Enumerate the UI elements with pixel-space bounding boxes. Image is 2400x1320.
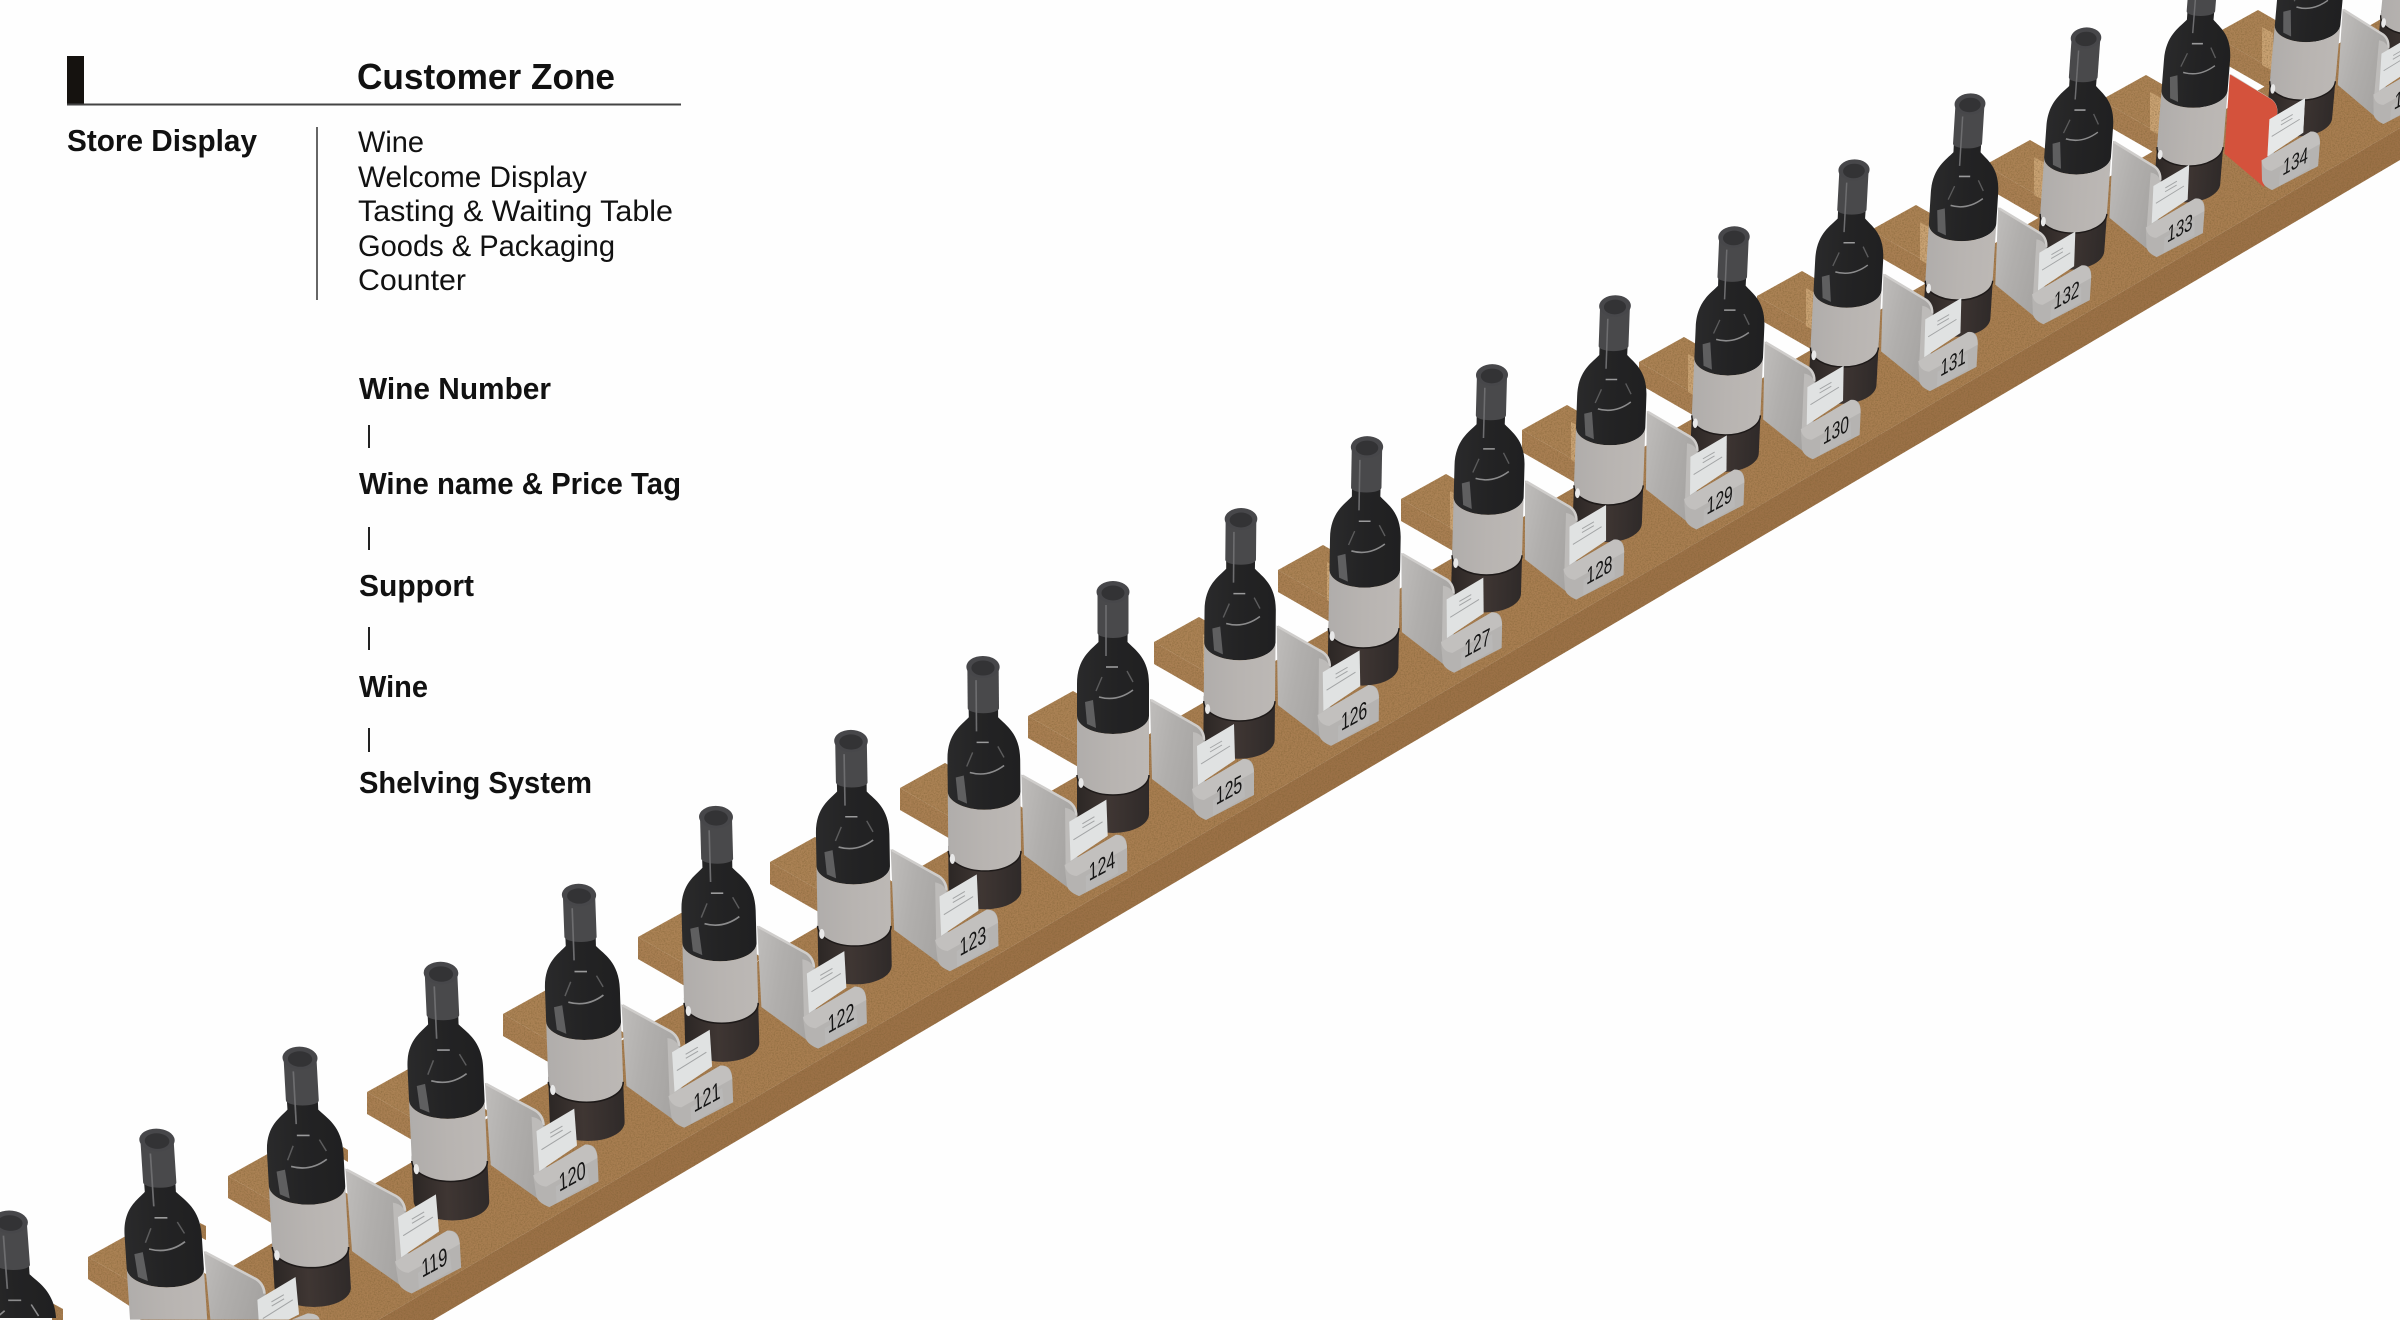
wine number: 129 (1706, 480, 1733, 521)
support, tag and number holder (485, 1083, 600, 1207)
wine unit 129 (1572, 295, 1751, 542)
support, tag and number holder (2221, 74, 2325, 190)
wine unit 118, cropped by the frame (118, 1129, 320, 1320)
support, tag and number holder (2333, 9, 2400, 124)
wine unit 136 (2375, 0, 2400, 70)
wine number: 125 (1216, 770, 1242, 811)
red support panel (2221, 74, 2280, 187)
wine number: 123 (959, 920, 986, 962)
heading: store display: Store Display (67, 123, 258, 158)
wine number: 127 (1464, 623, 1491, 664)
wine bottle (2265, 0, 2352, 136)
wine bottle (2153, 0, 2238, 202)
support, tag and number holder (2105, 141, 2209, 257)
wine bottle (403, 962, 490, 1221)
wine number: 126 (1341, 696, 1367, 737)
wine unit 123 (814, 730, 999, 984)
wine unit 124 (947, 656, 1128, 909)
wine number: 121 (693, 1075, 721, 1118)
red panel tag and holder (2259, 98, 2323, 190)
wine unit 125 (1077, 581, 1254, 833)
wine unit 120 (403, 962, 600, 1221)
wine number: 130 (1823, 410, 1849, 451)
wine number: 124 (1089, 845, 1115, 887)
support, tag and number holder (757, 926, 868, 1049)
wine bottle (1922, 93, 2004, 337)
wine bottle (947, 656, 1022, 909)
wine unit 132 (1922, 93, 2103, 337)
support, tag and number holder (1759, 341, 1864, 459)
wine number: 133 (2166, 209, 2194, 249)
wine bottle (261, 1047, 352, 1307)
wine unit 130 (1689, 226, 1869, 472)
wine number: 131 (1940, 343, 1967, 382)
wine unit 117, cropped by the frame (0, 1211, 56, 1318)
component hierarchy list (359, 371, 681, 800)
component hierarchy list: Wine Number (359, 371, 551, 406)
wine number: 128 (1586, 550, 1613, 591)
wine unit 122 (679, 806, 868, 1062)
component hierarchy list: Wine (359, 669, 428, 704)
component hierarchy list: Wine name & Price Tag (359, 466, 681, 501)
store display list: Wine (358, 126, 424, 159)
wine unit 133 (2036, 27, 2217, 270)
wine bottle (814, 730, 892, 984)
wine bottle (1203, 508, 1277, 759)
support, tag and number holder (1877, 274, 1982, 391)
wine bottle (1689, 226, 1769, 472)
wine bottle (541, 884, 625, 1141)
wine unit 121 (541, 884, 735, 1141)
store display list: Welcome Display (358, 161, 587, 194)
main shelf board front face (378, 128, 2400, 1320)
wine number: 132 (2053, 276, 2080, 316)
support, tag and number holder (621, 1004, 734, 1128)
wine bottle (1807, 159, 1889, 404)
store display list: Counter (358, 264, 466, 297)
header: black marker and rule (67, 56, 681, 106)
title: Customer Zone (357, 56, 615, 97)
wine number: 120 (558, 1155, 586, 1198)
wine bottle (679, 806, 760, 1062)
wine bottle (1451, 364, 1527, 612)
support, tag and number holder (1150, 699, 1254, 820)
wine bottle (2375, 0, 2400, 70)
store display list: Goods & Packaging (358, 230, 615, 263)
component hierarchy list: Support (359, 568, 474, 603)
component hierarchy list: Shelving System (359, 765, 592, 800)
support, tag and number holder (1522, 480, 1626, 600)
wine bottle (1077, 581, 1149, 833)
support, tag and number holder (345, 1169, 463, 1294)
wine bottle, cropped (0, 1211, 56, 1318)
support, tag and number holder (1991, 207, 2096, 324)
store display list (358, 126, 673, 297)
wine bottle (1327, 436, 1403, 686)
wine bottle, cropped (118, 1129, 207, 1320)
support and tag, cropped (204, 1251, 320, 1320)
support, tag and number holder (1643, 411, 1747, 529)
wine unit 119 (261, 1047, 463, 1307)
wine number: 134 (2282, 143, 2309, 181)
wine number: 122 (827, 996, 855, 1039)
wine unit 126 (1203, 508, 1381, 759)
wine unit 128 (1451, 364, 1629, 612)
divider (316, 127, 318, 300)
wine unit 127 (1327, 436, 1506, 686)
wine bottle (2036, 27, 2120, 270)
wine unit 134 with red support (2153, 0, 2334, 202)
wine unit 131 (1807, 159, 1988, 404)
support, tag and number holder (891, 849, 999, 971)
wine bottle (1572, 295, 1650, 542)
support, tag and number holder (1276, 625, 1380, 746)
wine number: 119 (421, 1241, 448, 1284)
store display list: Tasting & Waiting Table (358, 195, 673, 228)
support, tag and number holder (1021, 775, 1127, 896)
support, tag and number holder (1399, 553, 1503, 673)
wine unit 135 (2265, 0, 2400, 136)
